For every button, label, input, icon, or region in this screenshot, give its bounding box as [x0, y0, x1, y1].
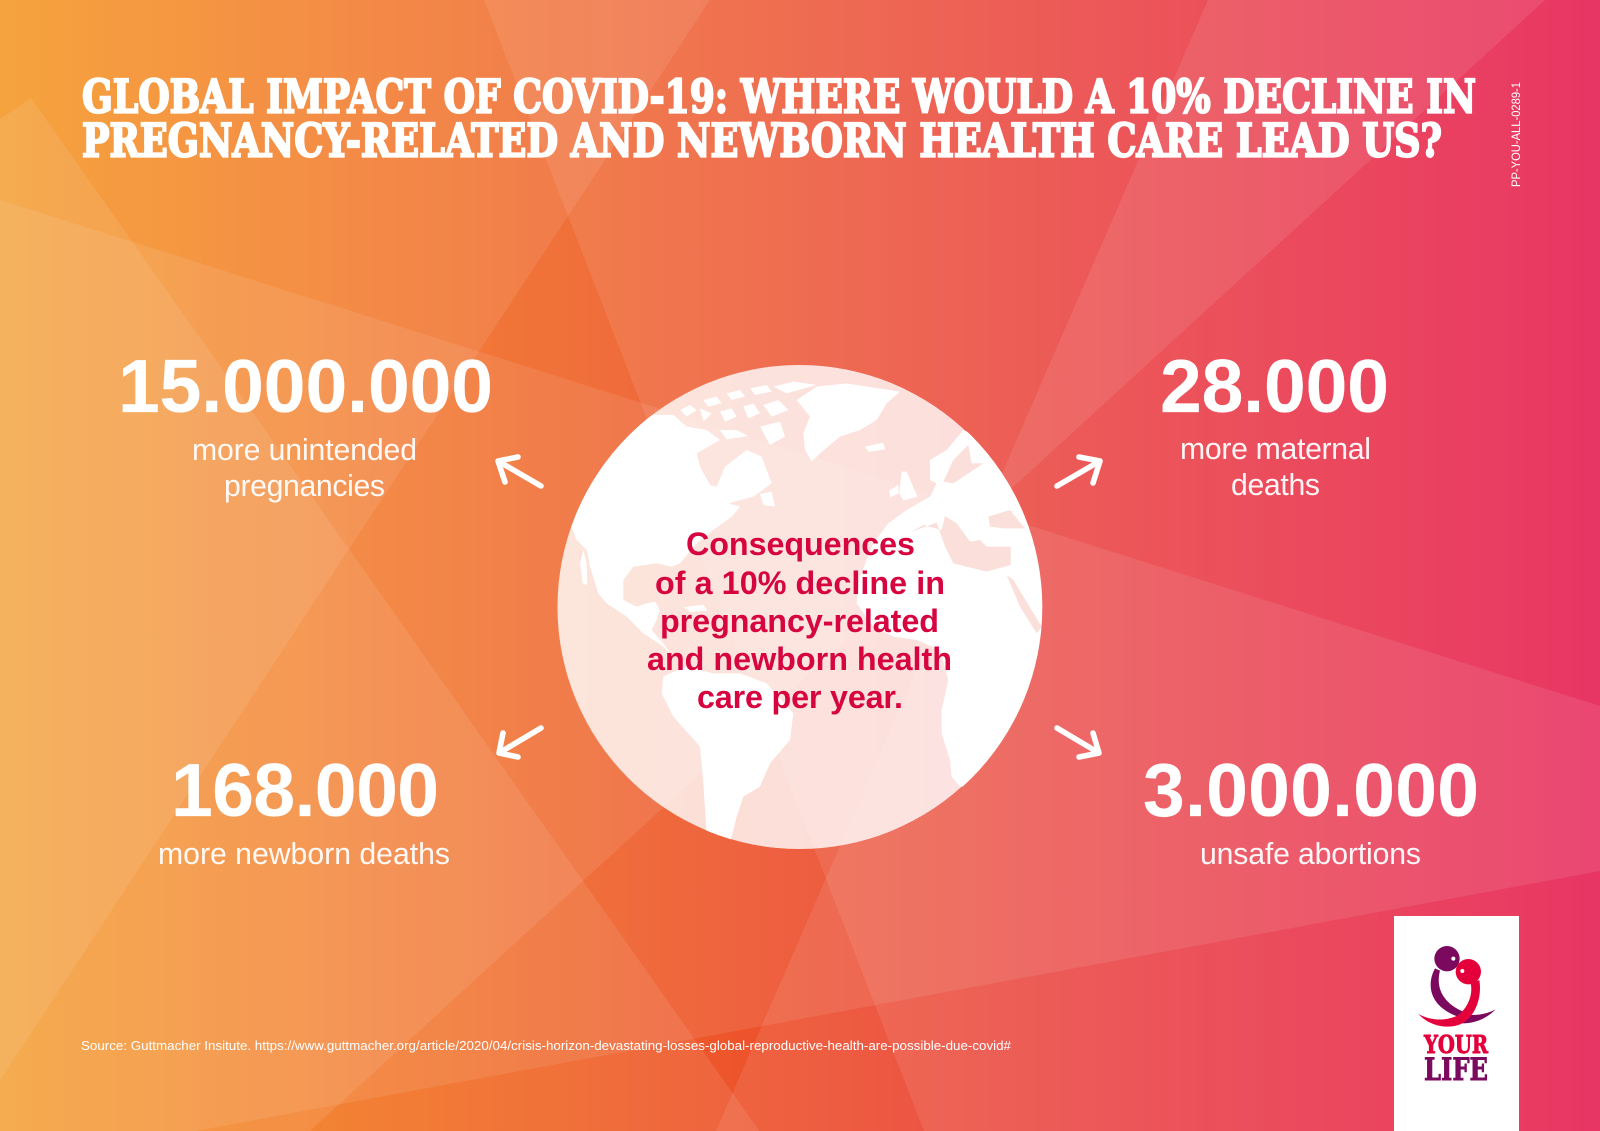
stat: maternal deaths: 28.000: [1160, 344, 1389, 428]
logo panel: [1394, 916, 1519, 1131]
central text: pregnancy-related: [660, 603, 939, 639]
arrow: top right: [1057, 457, 1100, 486]
globe: [558, 365, 1042, 849]
world map land: [572, 382, 1042, 840]
arrow: top left: [498, 457, 541, 486]
central text: and newborn health: [647, 641, 952, 677]
stat: maternal deaths: more maternal: [1180, 433, 1371, 466]
stat: unsafe abortions: unsafe abortions: [1200, 838, 1421, 871]
stat: unintended pregnancies: 15.000.000: [118, 344, 493, 428]
logo wordmark: YOUR: [1423, 1030, 1489, 1059]
stat: unintended pregnancies: [118, 344, 493, 503]
title: [82, 70, 1476, 168]
source line: Source: Guttmacher Insitute. https://www.guttmacher.org/article/2020/04/crisis-horizon-devastating-losses-global-reproductive-health-are-possible-due-covid#: [81, 1039, 1011, 1053]
stat: unsafe abortions: 3.000.000: [1143, 748, 1479, 832]
logo wordmark: LIFE: [1424, 1052, 1488, 1088]
stat: maternal deaths: deaths: [1231, 469, 1320, 502]
document code: PP-YOU-ALL-0289-1: [1509, 82, 1523, 187]
central text: [647, 526, 952, 715]
stat: unintended pregnancies: pregnancies: [224, 470, 385, 503]
central text: Consequences: [686, 526, 915, 562]
globe disc: [558, 365, 1042, 849]
central text: care per year.: [697, 679, 903, 715]
stat: newborn deaths: 168.000: [171, 748, 439, 832]
logo mark: [1418, 946, 1496, 1027]
stat: newborn deaths: [158, 748, 450, 871]
arrow: bottom right: [1057, 728, 1099, 757]
logo wordmark: [1423, 1030, 1489, 1088]
stat: maternal deaths: [1160, 344, 1389, 502]
central text: of a 10% decline in: [655, 565, 945, 601]
stat: newborn deaths: more newborn deaths: [158, 838, 450, 871]
stat: unsafe abortions: [1143, 748, 1479, 871]
stat: unintended pregnancies: more unintended: [192, 434, 417, 467]
arrow: bottom left: [499, 728, 541, 757]
inland seas: [912, 445, 1042, 633]
